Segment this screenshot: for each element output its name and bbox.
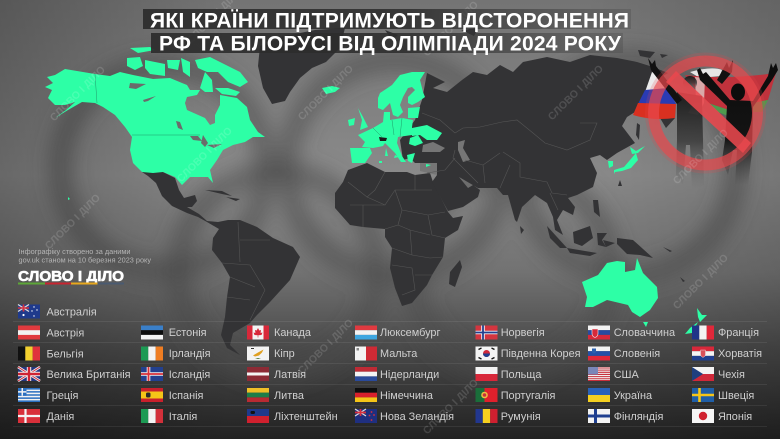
Норвегія: Норвегія xyxy=(501,327,545,339)
watermarks: СЛОВО І ДІЛО xyxy=(671,127,731,187)
lakes xyxy=(129,83,222,148)
Russian flag xyxy=(633,72,676,119)
Румунія: Румунія xyxy=(501,411,541,423)
Австралія: Австралія xyxy=(46,306,97,318)
Ірландія xyxy=(141,346,211,360)
source note xyxy=(18,248,152,264)
Словаччина xyxy=(588,326,676,340)
Словенія xyxy=(588,346,660,360)
Бельгія: Бельгія xyxy=(46,348,84,360)
США xyxy=(588,367,640,381)
Словаччина: Словаччина xyxy=(614,327,676,339)
borders xyxy=(222,113,597,320)
Хорватія xyxy=(692,346,762,360)
title: РФ ТА БІЛОРУСІ ВІД ОЛІМПІАДИ 2024 РОКУ xyxy=(159,32,622,56)
Латвія: Латвія xyxy=(274,369,306,381)
Норвегія xyxy=(476,326,545,340)
Данія: Данія xyxy=(46,411,74,423)
title: ЯКІ КРАЇНИ ПІДТРИМУЮТЬ ВІДСТОРОНЕННЯ xyxy=(150,10,629,32)
Німеччина xyxy=(355,388,434,402)
Нова Зеландія xyxy=(355,409,454,423)
Португалія: Португалія xyxy=(501,390,556,402)
green: Europe xyxy=(322,72,442,167)
Словенія: Словенія xyxy=(614,348,660,360)
Ліхтенштейн: Ліхтенштейн xyxy=(274,411,338,423)
Австралія xyxy=(18,304,97,318)
Румунія xyxy=(476,409,541,423)
Нова Зеландія: Нова Зеландія xyxy=(380,411,454,423)
watermarks: СЛОВО І ДІЛО xyxy=(421,0,481,59)
Канада: Канада xyxy=(274,327,312,339)
Іспанія xyxy=(141,388,204,402)
Україна xyxy=(588,388,653,402)
Греція xyxy=(18,388,79,402)
Хорватія: Хорватія xyxy=(718,348,762,360)
world map xyxy=(45,28,707,355)
title xyxy=(143,9,631,56)
Південна Корея xyxy=(476,346,581,360)
Ісландія: Ісландія xyxy=(169,369,210,381)
Фінляндія: Фінляндія xyxy=(614,411,663,423)
Франція: Франція xyxy=(718,327,759,339)
logo: Слово і діло: СЛОВО І ДІЛО xyxy=(18,268,124,285)
Нідерланди: Нідерланди xyxy=(380,369,439,381)
Швеція: Швеція xyxy=(718,390,754,402)
Польща: Польща xyxy=(501,369,542,381)
Литва xyxy=(247,388,305,402)
source note: Інфографіку створено за даними xyxy=(18,248,131,256)
Японія xyxy=(692,409,752,423)
Австрія xyxy=(18,326,84,340)
Belarusian flag xyxy=(685,68,776,118)
Данія xyxy=(18,409,74,423)
Бельгія xyxy=(18,346,84,360)
Німеччина: Німеччина xyxy=(380,390,434,402)
Україна: Україна xyxy=(614,390,653,402)
green: Asia Pacific xyxy=(582,146,707,334)
Нідерланди xyxy=(355,367,439,381)
Іспанія: Іспанія xyxy=(169,390,204,402)
Ліхтенштейн xyxy=(247,409,338,423)
watermarks: СЛОВО І ДІЛО xyxy=(671,252,731,312)
Польща xyxy=(476,367,542,381)
watermarks: СЛОВО І ДІЛО xyxy=(175,125,235,185)
watermarks: СЛОВО І ДІЛО xyxy=(43,192,103,252)
fan silhouettes xyxy=(648,58,778,190)
watermarks: СЛОВО І ДІЛО xyxy=(421,377,481,437)
Ісландія xyxy=(141,367,210,381)
source note: gov.uk станом на 10 березня 2023 року xyxy=(18,256,152,264)
США: США xyxy=(614,369,640,381)
Естонія: Естонія xyxy=(169,327,207,339)
Канада xyxy=(247,326,312,340)
Кіпр: Кіпр xyxy=(274,348,295,360)
Італія xyxy=(141,409,197,423)
Південна Корея: Південна Корея xyxy=(501,348,581,360)
watermarks: СЛОВО І ДІЛО xyxy=(48,64,108,124)
Мальта xyxy=(355,346,418,360)
Велика Британія xyxy=(18,367,131,381)
Люксембург: Люксембург xyxy=(380,327,440,339)
legend: countries supporting the ban xyxy=(18,304,762,423)
Італія: Італія xyxy=(169,411,197,423)
badge: banned Russia and Belarus fans xyxy=(633,54,778,190)
Кіпр xyxy=(247,346,295,360)
Фінляндія xyxy=(588,409,663,423)
Португалія xyxy=(476,388,556,402)
watermarks: СЛОВО І ДІЛО xyxy=(546,63,606,123)
Чехія: Чехія xyxy=(718,369,745,381)
Швеція xyxy=(692,388,754,402)
Ірландія: Ірландія xyxy=(169,348,211,360)
seas xyxy=(420,140,470,175)
Естонія xyxy=(141,326,207,340)
Чехія xyxy=(692,367,745,381)
country list dividers xyxy=(13,322,767,426)
Франція xyxy=(692,326,759,340)
dark countries xyxy=(142,28,685,355)
Греція: Греція xyxy=(46,390,79,402)
watermarks: СЛОВО І ДІЛО xyxy=(296,63,356,123)
Латвія xyxy=(247,367,306,381)
Люксембург xyxy=(355,326,440,340)
green: North America xyxy=(45,47,265,200)
watermarks: СЛОВО І ДІЛО xyxy=(296,317,356,377)
prohibition sign xyxy=(646,54,764,172)
Японія: Японія xyxy=(718,411,752,423)
Мальта: Мальта xyxy=(380,348,418,360)
Австрія: Австрія xyxy=(46,328,84,340)
Литва: Литва xyxy=(274,390,305,402)
Велика Британія: Велика Британія xyxy=(46,369,131,381)
